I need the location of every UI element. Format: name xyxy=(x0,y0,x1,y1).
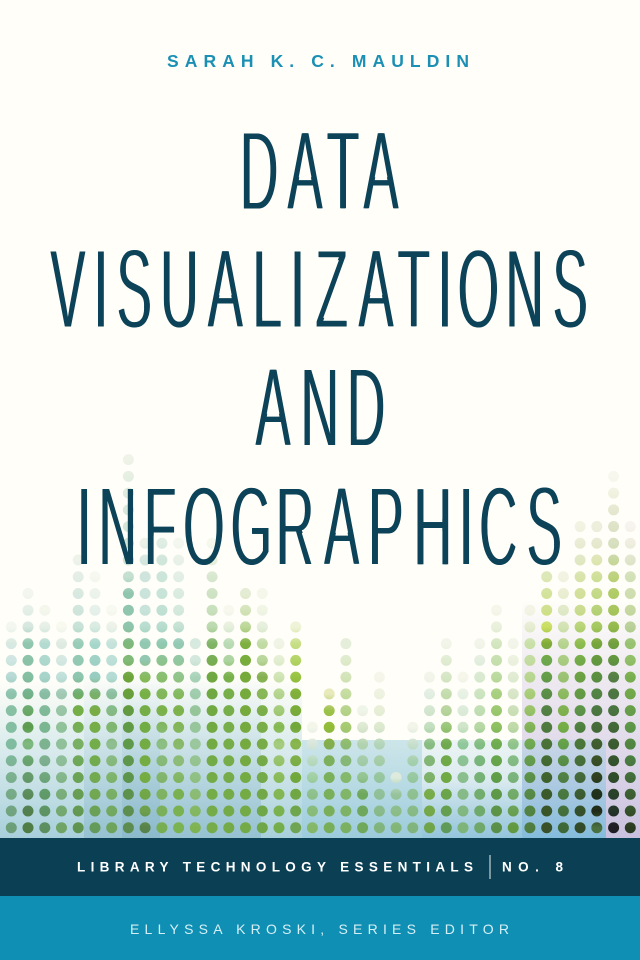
series editor band xyxy=(0,896,640,960)
title: VISUALIZATIONS xyxy=(50,224,588,351)
title xyxy=(50,106,588,588)
title: DATA xyxy=(240,106,399,233)
title: INFOGRAPHICS xyxy=(77,462,562,588)
series band xyxy=(0,838,640,896)
dot matrix chart xyxy=(11,458,630,828)
separator and number xyxy=(490,855,563,879)
separator and number: NO. 8 xyxy=(502,860,563,874)
title: AND xyxy=(255,343,385,469)
author name: SARAH K. C. MAULDIN xyxy=(167,51,469,71)
series editor: ELLYSSA KROSKI, SERIES EDITOR xyxy=(130,921,509,937)
series name: LIBRARY TECHNOLOGY ESSENTIALS xyxy=(77,860,473,874)
